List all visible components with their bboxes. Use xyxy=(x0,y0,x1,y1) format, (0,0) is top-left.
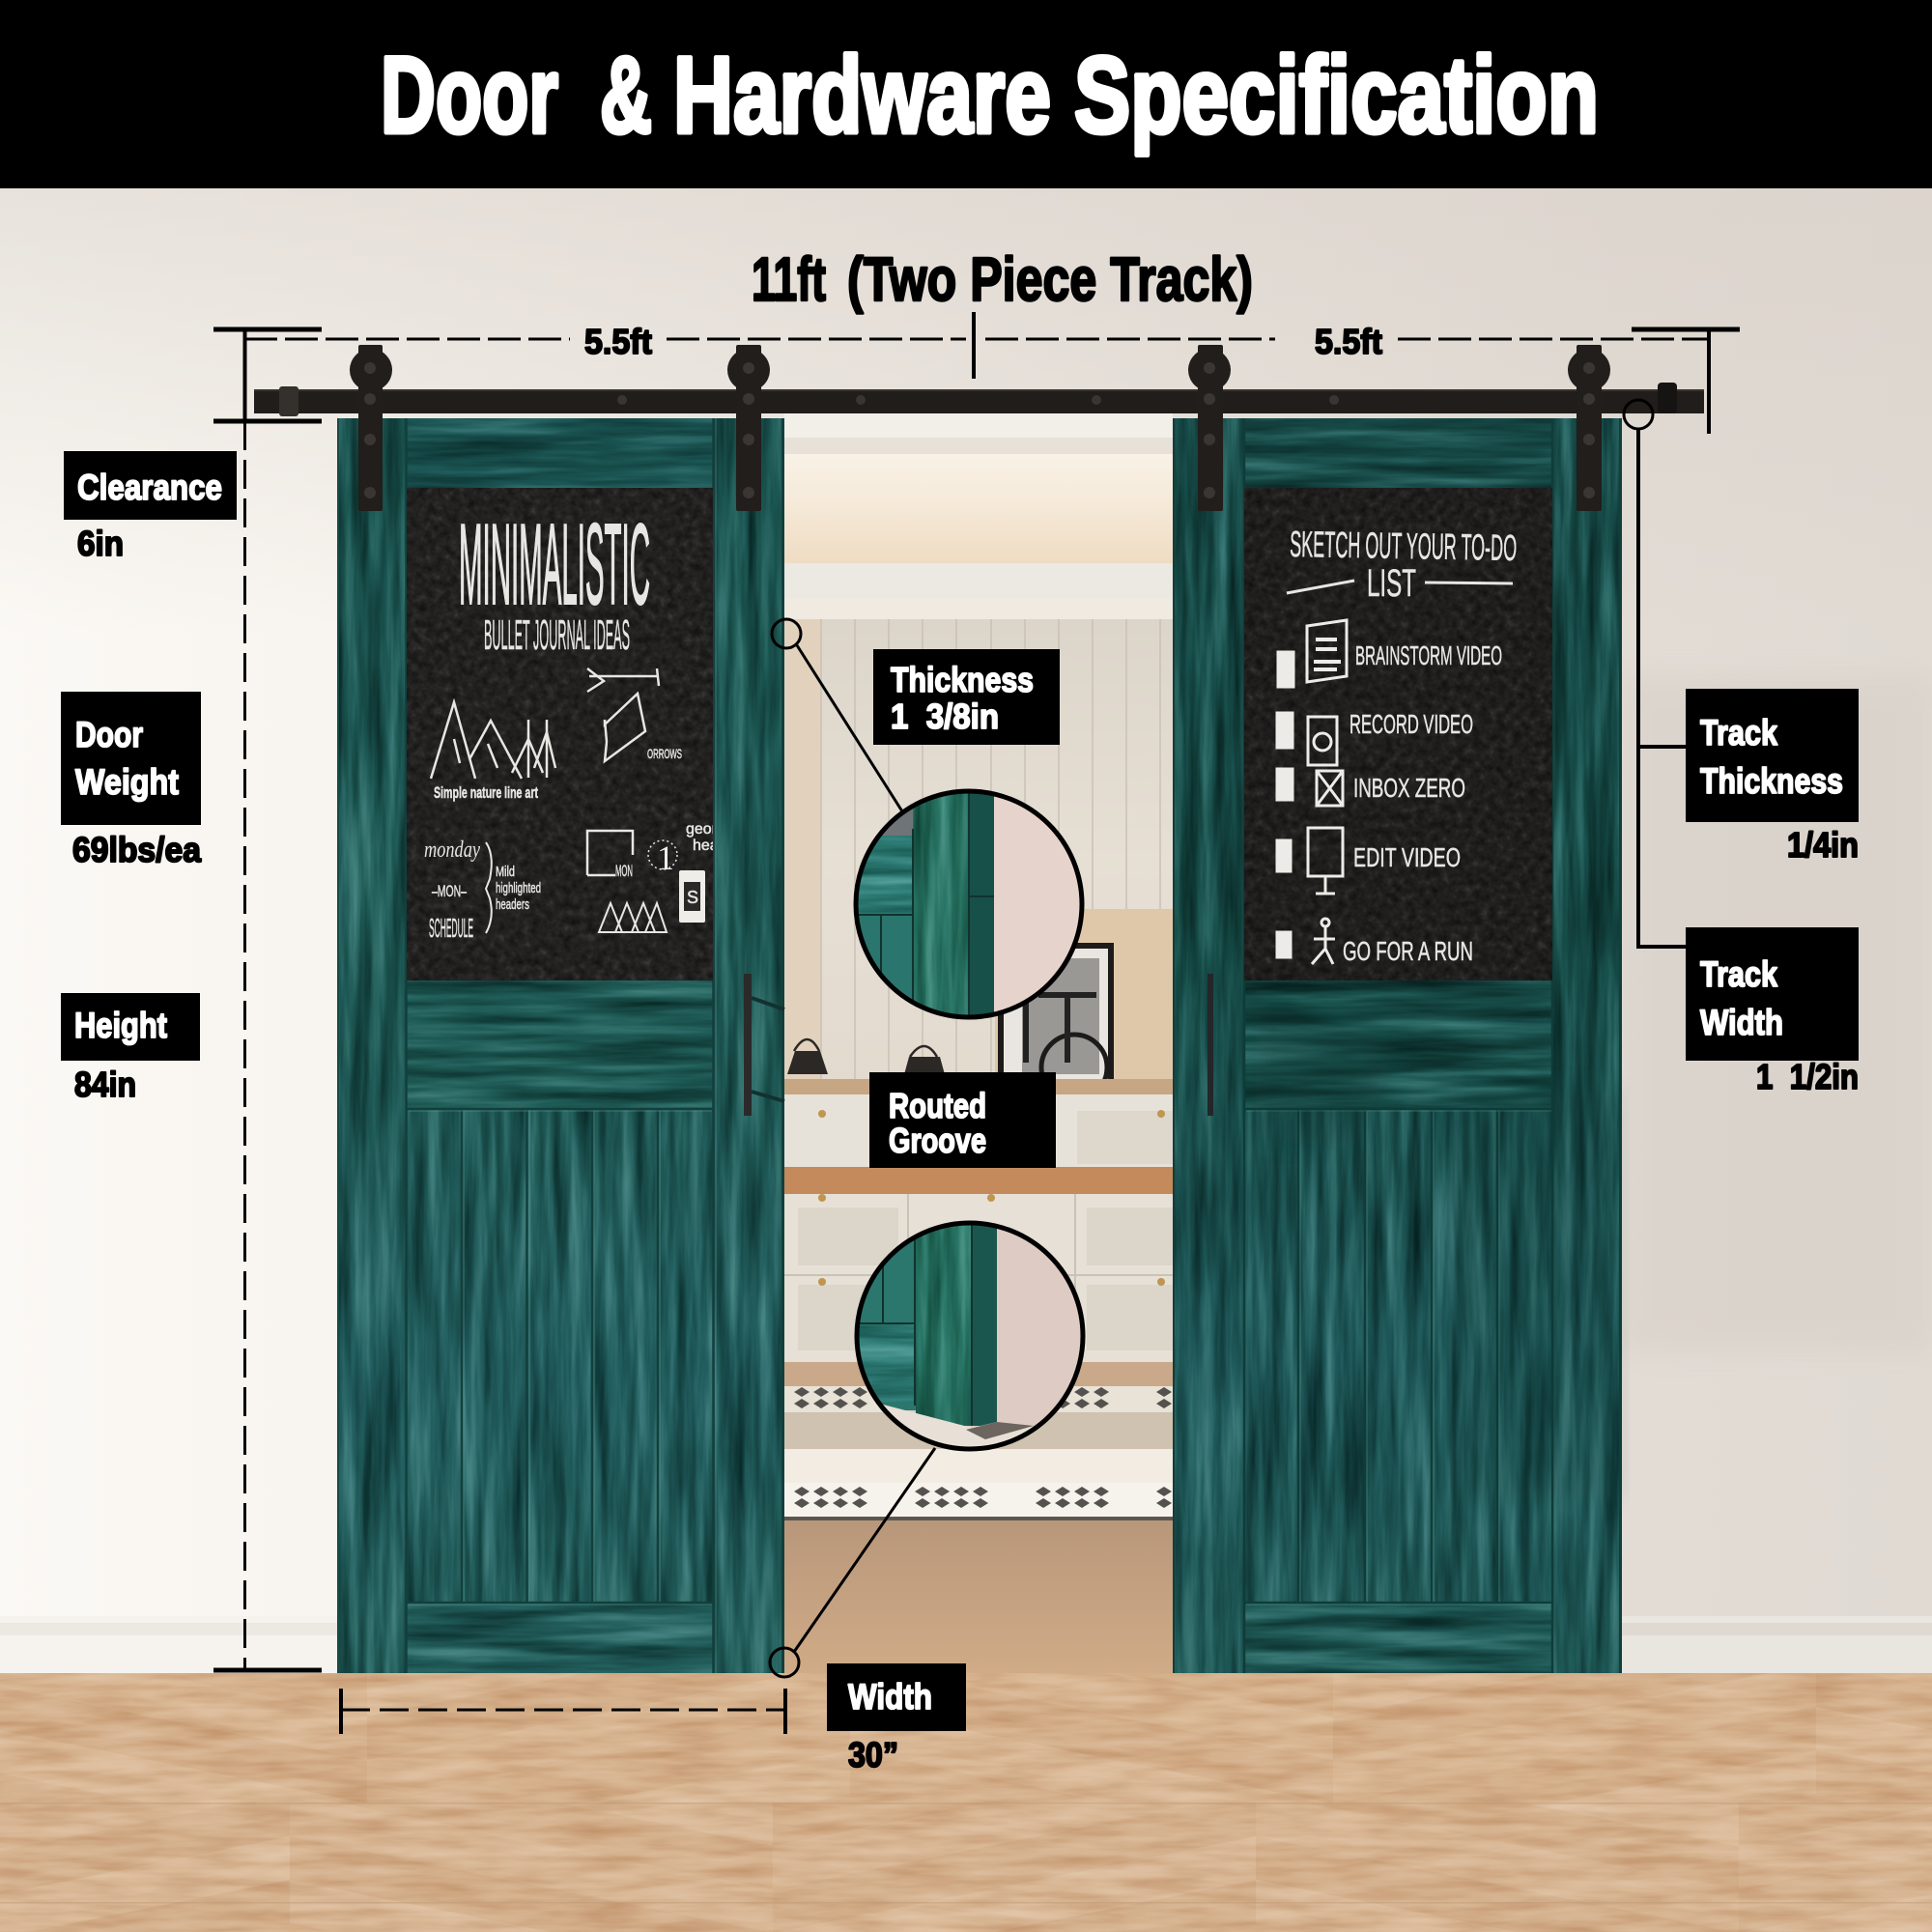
label: thickness 1 3/8in: 1 3/8in xyxy=(891,696,999,736)
callout leader: routed groove xyxy=(770,1448,935,1677)
chalkboard: minimalistic: S xyxy=(687,888,698,907)
chalkboard: to-do list: GO FOR A RUN xyxy=(1343,936,1473,966)
callout leader: track xyxy=(1624,400,1686,947)
label: track width 1 1/2in: 1 1/2in xyxy=(1756,1057,1859,1096)
hanger straps xyxy=(350,345,1610,511)
label: width 30 inches: 30” xyxy=(848,1735,898,1775)
chalkboard: minimalistic: geome xyxy=(686,821,733,838)
chalkboard: minimalistic: –MON– xyxy=(432,882,467,900)
kitchen floor and rug xyxy=(784,1362,1173,1386)
chalkboard: minimalistic: monday xyxy=(424,838,480,863)
label: height 84in: Height xyxy=(74,1006,167,1045)
kitchen view through the opening xyxy=(784,413,1173,1673)
chalkboard: minimalistic: MON xyxy=(615,862,633,880)
chalkboard: to-do list xyxy=(1244,488,1552,980)
counter and cabinets xyxy=(784,1079,1173,1094)
baseboard xyxy=(0,1616,1932,1673)
chalkboard: minimalistic: SCHEDULE xyxy=(429,913,473,943)
ceiling and upper wall xyxy=(784,454,1173,563)
chalkboard: to-do list: RECORD VIDEO xyxy=(1350,709,1473,739)
header bar with title xyxy=(0,0,1932,188)
chalkboard: minimalistic: head xyxy=(693,838,727,854)
label: routed groove: Routed xyxy=(889,1086,986,1125)
label: thickness 1 3/8in xyxy=(873,649,1060,745)
label: track thickness 1/4in: 1/4in xyxy=(1787,825,1859,865)
dimension label: 5.5ft right: 5.5ft xyxy=(1315,322,1382,361)
chalkboard: minimalistic: Mild xyxy=(496,864,515,880)
callout leader: thickness xyxy=(772,619,902,811)
label: routed groove: Groove xyxy=(889,1121,986,1160)
herringbone wood floor xyxy=(0,1673,1932,1932)
label: track width 1 1/2in xyxy=(1686,927,1859,1096)
infographic: door and hardware specification: MINIMALISTIC xyxy=(459,500,650,629)
framed bicycle picture xyxy=(998,943,1114,1079)
wall background xyxy=(0,188,1932,1676)
label: door weight 69lbs/ea xyxy=(61,692,202,869)
chalkboard: to-do list: SKETCH OUT YOUR TO-DO xyxy=(1290,525,1518,569)
label: height 84in: 84in xyxy=(74,1065,136,1104)
label: height 84in xyxy=(61,993,200,1104)
magnifier: door edge bottom xyxy=(850,1217,1092,1459)
label: width 30 inches xyxy=(827,1663,966,1775)
label: door weight 69lbs/ea: Door xyxy=(75,715,143,754)
label: width 30 inches: Width xyxy=(848,1677,932,1717)
label: clearance 6in: 6in xyxy=(77,524,124,563)
panel: left door xyxy=(337,418,784,1673)
chalkboard: to-do list: INBOX ZERO xyxy=(1353,773,1465,803)
dimension: track length lines xyxy=(244,312,1709,379)
to-do icons xyxy=(1277,620,1347,964)
chalkboard: minimalistic: 1 xyxy=(657,838,674,877)
chalkboard: minimalistic: ORROWS xyxy=(647,746,682,761)
label: track thickness 1/4in: Thickness xyxy=(1700,761,1843,801)
chalkboard: minimalistic: Simple nature line art xyxy=(434,783,538,802)
label: routed groove xyxy=(869,1072,1056,1168)
label: track width 1 1/2in: Width xyxy=(1700,1003,1783,1042)
dimension label: 5.5ft left: 5.5ft xyxy=(584,322,652,361)
magnifier: door edge top xyxy=(850,787,1092,1019)
track length heading: 11ft xyxy=(752,244,826,314)
label: thickness 1 3/8in: Thickness xyxy=(891,660,1034,699)
barn door track xyxy=(254,383,1704,416)
label: track thickness 1/4in xyxy=(1686,689,1859,865)
track length heading: (Two Piece Track) xyxy=(847,244,1253,314)
chalkboard: to-do list: EDIT VIDEO xyxy=(1353,842,1461,872)
door handle xyxy=(744,974,784,1116)
label: track thickness 1/4in: Track xyxy=(1700,713,1777,753)
panel: left door: BULLET JOURNAL IDEAS xyxy=(484,611,630,659)
chalkboard: minimalistic xyxy=(407,488,733,980)
label: clearance 6in: Clearance xyxy=(77,468,222,507)
backsplash xyxy=(995,909,1173,1079)
header bar with title: Hardware xyxy=(673,35,1051,156)
kettles xyxy=(787,1051,945,1074)
header bar with title: & xyxy=(600,35,652,156)
label: door weight 69lbs/ea: 69lbs/ea xyxy=(72,830,202,869)
panel: right door xyxy=(1173,418,1622,1673)
dimension: clearance and height markers xyxy=(213,328,1740,1670)
chalkboard: to-do list: LIST xyxy=(1367,562,1416,605)
label: track width 1 1/2in: Track xyxy=(1700,954,1777,994)
label: clearance 6in xyxy=(64,451,237,563)
dimension: door width xyxy=(341,1689,785,1734)
header bar with title: Door xyxy=(381,35,558,156)
header bar with title: Specification xyxy=(1074,35,1599,156)
chalkboard: minimalistic: highlighted xyxy=(496,880,541,896)
chalkboard: minimalistic: headers xyxy=(496,896,529,913)
label: door weight 69lbs/ea: Weight xyxy=(75,762,179,802)
door handle xyxy=(1208,974,1213,1116)
chalkboard: to-do list: BRAINSTORM VIDEO xyxy=(1355,640,1502,670)
